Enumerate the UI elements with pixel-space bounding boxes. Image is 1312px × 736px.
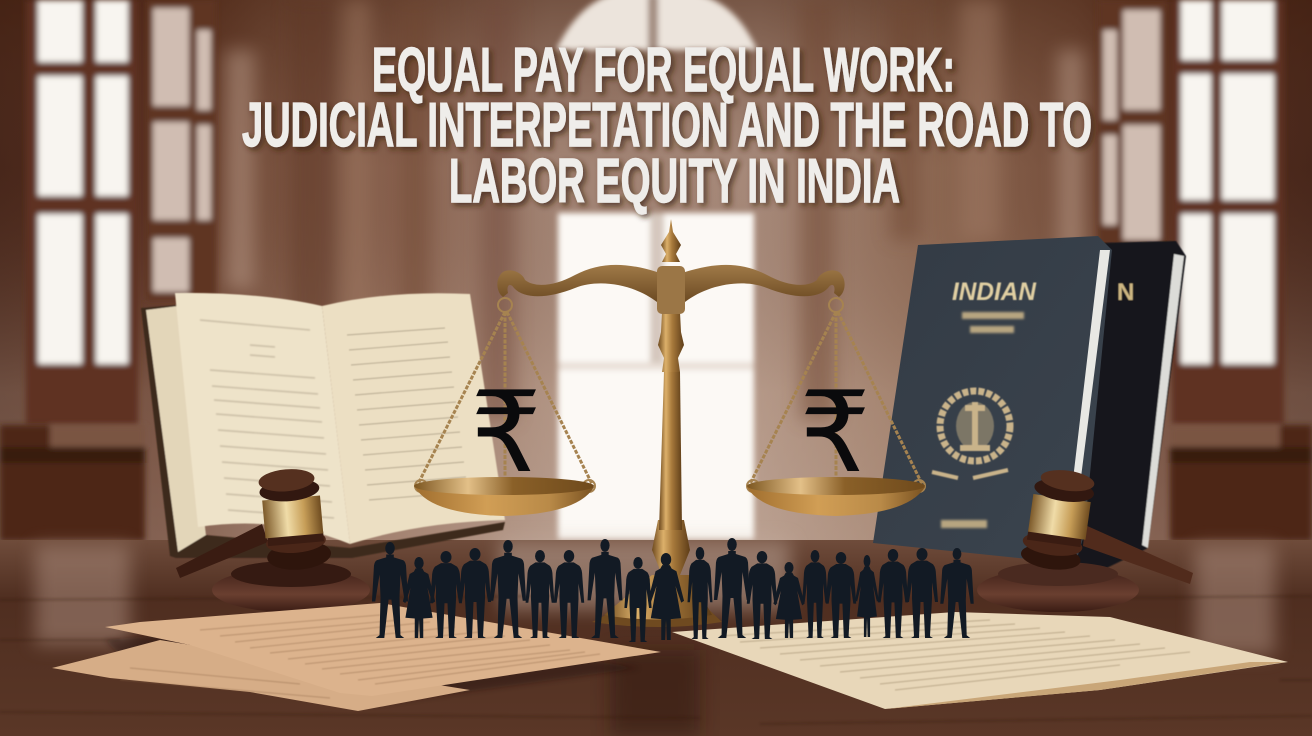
- legal papers: left: [52, 603, 661, 711]
- gavel: left: [176, 466, 370, 612]
- pan: left: [414, 477, 594, 516]
- right page: [322, 293, 505, 544]
- window: left: [26, 0, 216, 425]
- pan: right: [747, 477, 925, 516]
- title: EQUAL PAY FOR EQUAL WORK:: [372, 36, 955, 105]
- column: [659, 372, 682, 530]
- open book: [141, 293, 505, 558]
- left edge of book: [146, 306, 206, 552]
- hub: [657, 266, 685, 314]
- balance scale: [414, 219, 925, 627]
- emblem: [932, 391, 1010, 478]
- handle: [1083, 525, 1193, 584]
- blurred small print: [941, 312, 1024, 528]
- silhouettes of workers: [372, 538, 974, 642]
- window: centre: [556, 0, 757, 540]
- window: right: [1098, 0, 1284, 425]
- title: LABOR EQUITY IN INDIA: [449, 147, 900, 216]
- rings: [415, 298, 925, 492]
- base: [212, 561, 370, 612]
- book: back: N: [1117, 279, 1134, 306]
- label: INDIAN: INDIAN: [952, 278, 1037, 306]
- column base: [592, 520, 722, 627]
- table: [0, 540, 1312, 736]
- gavel: right: [977, 466, 1193, 612]
- title: [242, 36, 1092, 216]
- book: back: [1060, 241, 1186, 576]
- cabinets: [0, 425, 1312, 541]
- rupee: right: ₹: [799, 368, 871, 498]
- background: courtroom wall: [0, 0, 1312, 560]
- base: [977, 562, 1139, 612]
- head: [258, 466, 332, 572]
- rupee: left: ₹: [470, 368, 542, 498]
- handle: [176, 524, 268, 578]
- beam: [497, 265, 845, 302]
- finial: [658, 219, 684, 372]
- book: front, Indian: [873, 236, 1112, 565]
- head: [1019, 466, 1097, 574]
- chains: [418, 312, 922, 494]
- legal papers: right: [672, 612, 1288, 709]
- left page: [175, 293, 350, 544]
